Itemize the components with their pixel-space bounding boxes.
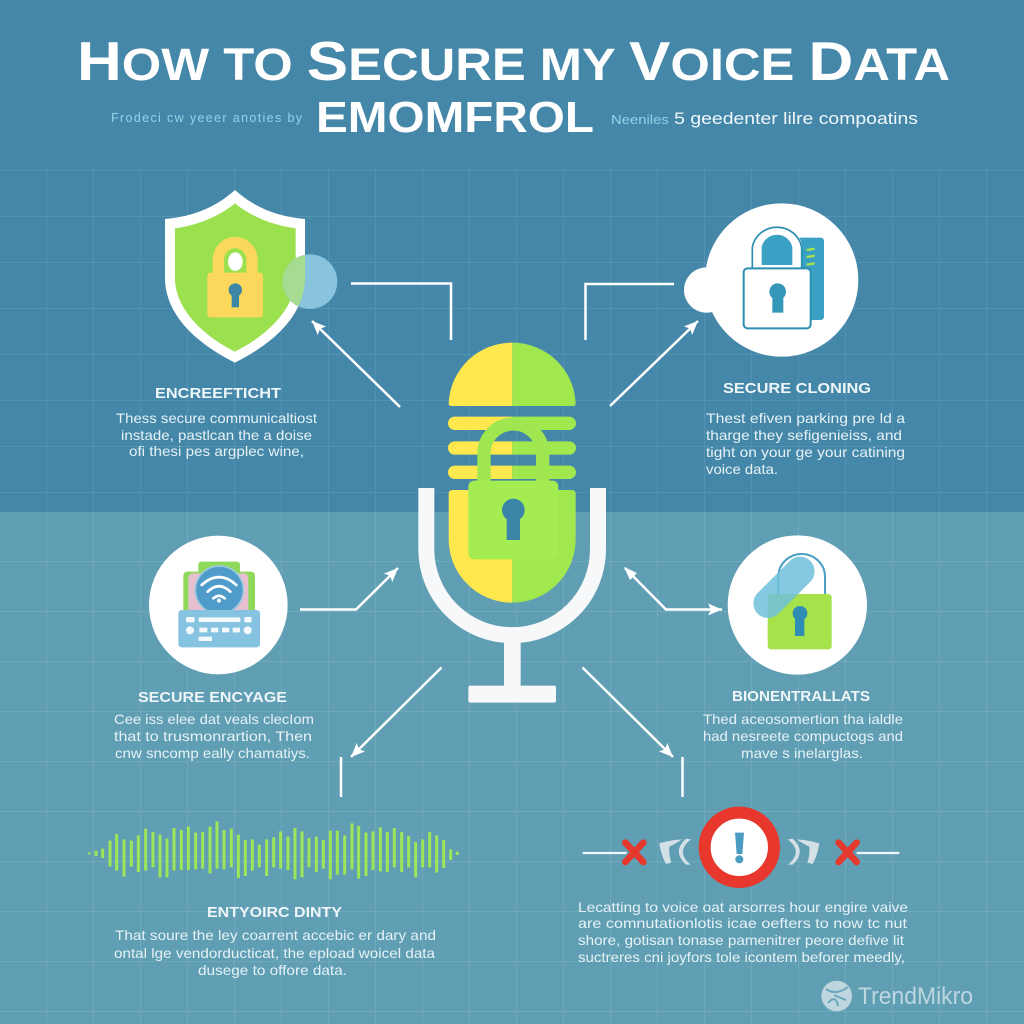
subtitle brand: EMOMFROL: [316, 93, 594, 142]
text block: secure cloning: Thest efiven parking pre ld a: [706, 410, 905, 426]
arrow: down right to warning: [582, 668, 673, 757]
text block: bionentrallats: mave s inelarglas.: [741, 745, 863, 761]
heading: entyoirc dinty: ENTYOIRC DINTY: [207, 904, 342, 921]
chart: voice waveform: [89, 821, 457, 879]
heading: secure encyage: SECURE ENCYAGE: [138, 689, 287, 706]
connector arrow: microphone to biometric lock: [625, 568, 722, 610]
text block: warning: are comnutationlotis icae oefters to now tc nut: [578, 915, 907, 931]
icon: padlock in white circle: [684, 203, 858, 357]
icon: warning with red crosses: [583, 813, 899, 882]
text block: secure cloning: tharge they sefigenieiss, and: [706, 427, 902, 443]
text block: secure encyage: Cee iss elee dat veals clecIom: [114, 711, 314, 727]
text block: warning: suctreres cni joyfors tole icontem beforer meedly,: [578, 949, 905, 965]
text block: encreefticht: Thess secure communicaltiost: [116, 410, 317, 426]
logo: trend micro: [821, 981, 973, 1011]
text block: encreefticht: instade, pastlcan the a doise: [121, 427, 312, 443]
heading: secure cloning: SECURE CLONING: [723, 380, 871, 397]
text block: bionentrallats: Thed aceosomertion tha ialdle: [703, 711, 903, 727]
logo: trend micro: TrendMikro: [858, 983, 973, 1010]
microphone with padlock: [426, 343, 598, 703]
microphone head: [448, 343, 576, 603]
text block: secure cloning: voice data.: [706, 461, 778, 477]
text block: secure encyage: cnw sncomp eally chamatiys.: [115, 745, 310, 761]
padlock: [468, 424, 558, 559]
text block: secure encyage: that to trusmonrartion, Then: [114, 728, 312, 744]
heading: bionentrallats: BIONENTRALLATS: [732, 688, 870, 705]
text block: bionentrallats: [703, 711, 903, 761]
text block: secure cloning: [706, 410, 905, 477]
text block: encreefticht: [116, 410, 317, 459]
arrow: to padlock circle: [610, 321, 698, 406]
subtitle left note: Frodeci cw yeeer anoties by: [111, 111, 303, 125]
microphone stand: [426, 488, 598, 703]
text block: warning: Lecatting to voice oat arsorres hour engire vaive: [578, 899, 908, 915]
connector: vertical line right: [681, 757, 684, 797]
icon: keyboard and wifi in white circle: [149, 536, 288, 674]
connector: bracket top right: [586, 284, 674, 340]
subtitle right note: Neeniles 5 geedenter lilre compoatins: [611, 109, 918, 128]
arrow: down left to waveform: [351, 668, 442, 757]
arrow: to shield: [312, 321, 400, 407]
icon: shield with padlock: [165, 190, 337, 363]
text block: secure cloning: tight on your ge your catining: [706, 444, 905, 460]
connector arrow: keyboard to microphone: [300, 568, 398, 610]
text block: entyoirc dinty: dusege to offore data.: [198, 962, 347, 978]
arrowhead: toward microphone right: [624, 567, 637, 580]
heading: encreefticht: ENCREEFTICHT: [155, 385, 281, 402]
text block: entyoirc dinty: [114, 927, 436, 978]
text block: entyoirc dinty: ontal lge vendorducticat, the epload woicel data: [114, 945, 435, 961]
text block: encreefticht: ofi thesi pes argplec wine,: [129, 443, 304, 459]
connector: bracket top left: [351, 284, 451, 340]
icon: padlock with capsule in white circle: [728, 535, 867, 675]
text block: warning: [578, 899, 908, 965]
text block: bionentrallats: had nesreete compuctogs and: [703, 728, 903, 744]
connector: vertical line left: [340, 757, 342, 797]
text block: warning: shore, gotisan tonase pamenitrer peore defive lit: [578, 932, 904, 948]
text block: entyoirc dinty: That soure the ley coarrent accebic er dary and: [115, 927, 436, 943]
title: HOW TO SECURE MY VOICE DATA: [77, 30, 950, 92]
text block: secure encyage: [114, 711, 314, 761]
